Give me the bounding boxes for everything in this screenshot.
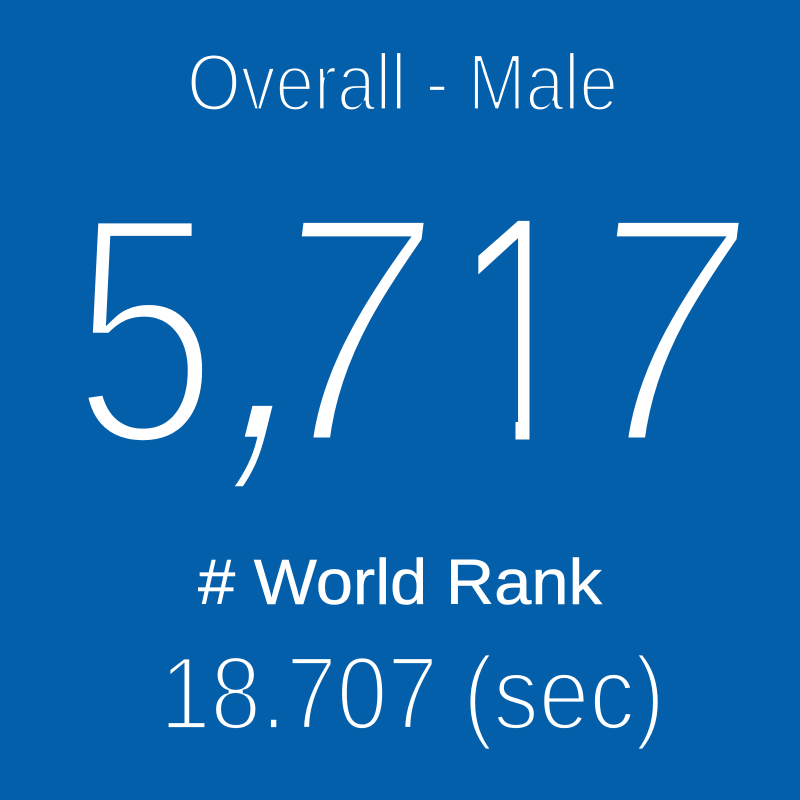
big number: , <box>191 92 381 525</box>
big number <box>88 220 739 486</box>
metric value: 18.707 (sec) <box>160 636 665 752</box>
big number: 7 <box>563 148 767 513</box>
big number: 5 <box>72 146 218 513</box>
title: Overall - Male <box>187 38 618 128</box>
big number: 7 <box>248 148 452 513</box>
big number: 1 <box>451 147 593 513</box>
metric label: # World Rank <box>198 546 603 618</box>
